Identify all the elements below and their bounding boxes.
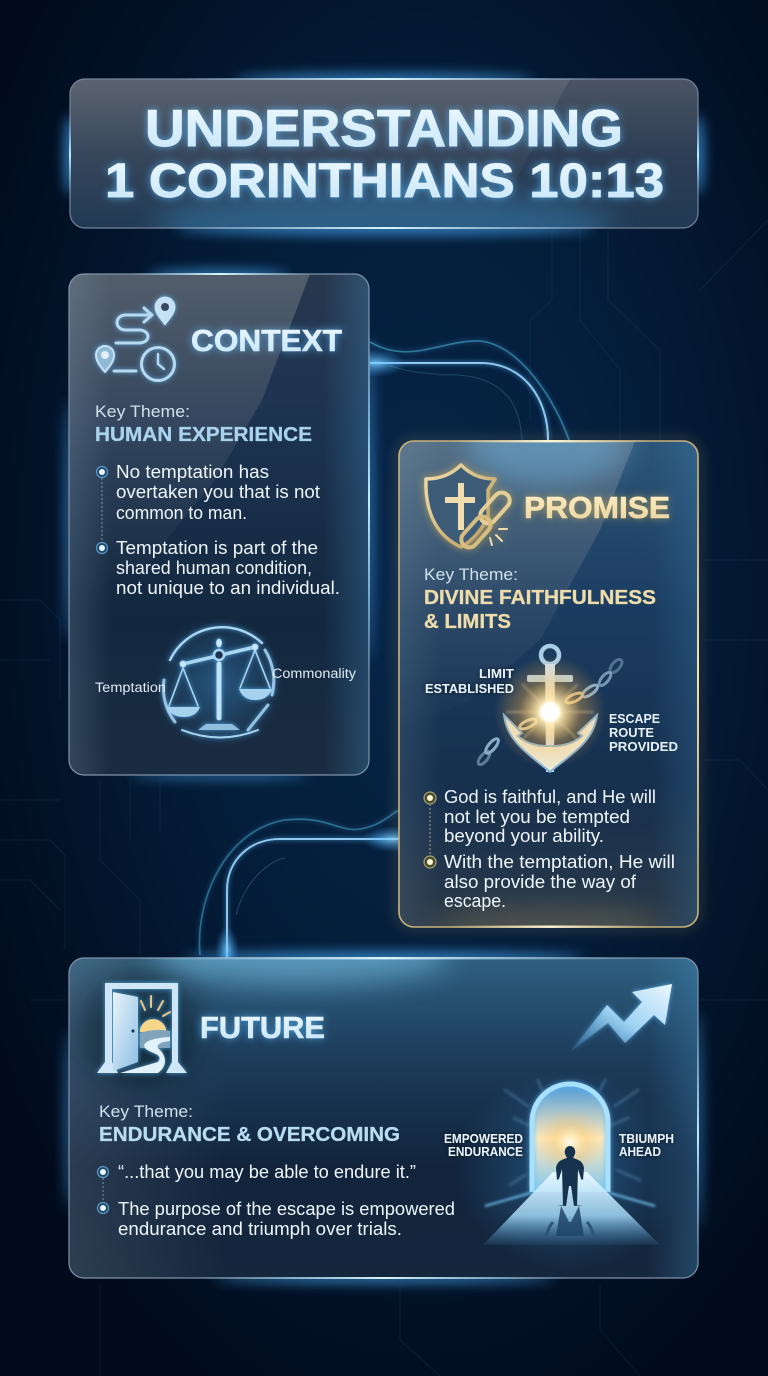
key theme: future: ENDURANCE & OVERCOMING: [99, 1123, 400, 1146]
label: empowered endurance: ENDURANCE: [448, 1145, 523, 1159]
label: triumph ahead: [619, 1132, 674, 1159]
bullets: context: not unique to an individual.: [116, 578, 340, 598]
key theme: promise: [424, 565, 656, 633]
label: empowered endurance: [444, 1132, 523, 1159]
bullets: future: endurance and triumph over trials.: [118, 1219, 402, 1239]
bullets: future: The purpose of the escape is empowered: [118, 1199, 455, 1219]
icon: arched doorway with figure: [455, 1070, 685, 1270]
key theme: context: [95, 402, 312, 446]
panel: future: [65, 925, 702, 1283]
label: escape route provided: ROUTE: [609, 726, 654, 740]
label: limit established: LIMIT: [479, 667, 514, 681]
bullets: future: [98, 1162, 455, 1239]
bullets: promise: [424, 787, 675, 911]
bullets: promise: also provide the way of: [444, 872, 637, 892]
icon: route with pins and clock: [96, 297, 175, 380]
key theme: promise: Key Theme:: [424, 565, 518, 584]
icon: balance scale: [153, 617, 285, 749]
icon: open door with sunrise path: [97, 983, 187, 1073]
key theme: promise: DIVINE FAITHFULNESS: [424, 586, 656, 609]
bullets: promise: God is faithful, and He will: [444, 787, 656, 807]
key theme: future: Key Theme:: [99, 1102, 193, 1121]
key theme: context: HUMAN EXPERIENCE: [95, 424, 312, 446]
title text: UNDERSTANDING: [145, 100, 623, 158]
label: empowered endurance: EMPOWERED: [444, 1132, 523, 1146]
bullets: promise: escape.: [444, 891, 506, 911]
panel: title: [65, 73, 703, 259]
heading: context: CONTEXT: [191, 323, 342, 358]
bullets: context: No temptation has: [116, 462, 269, 482]
heading: future: FUTURE: [200, 1010, 325, 1045]
icon: anchor with broken chain: [476, 646, 624, 772]
key theme: context: Key Theme:: [95, 402, 190, 421]
connector: context to promise: [346, 341, 569, 440]
label: temptation: Temptation: [95, 680, 166, 695]
label: escape route provided: [609, 712, 678, 754]
label: triumph ahead: TBIUMPH: [619, 1132, 674, 1146]
bullets: context: shared human condition,: [116, 558, 312, 578]
bullets: promise: not let you be tempted: [444, 807, 630, 827]
label: escape route provided: PROVIDED: [609, 740, 678, 754]
title text: [105, 100, 664, 208]
bullets: context: Temptation is part of the: [116, 538, 318, 558]
bullets: promise: beyond your ability.: [444, 826, 604, 846]
icon: shield with cross and broken chain: [426, 465, 513, 551]
bullets: context: [96, 462, 340, 598]
panel: context: [65, 270, 373, 779]
label: limit established: [425, 667, 514, 696]
title text: 1 CORINTHIANS 10:13: [105, 155, 664, 208]
bullets: context: overtaken you that is not: [116, 482, 320, 502]
icon: rising arrow: [570, 984, 672, 1052]
heading: promise: PROMISE: [524, 490, 670, 525]
key theme: promise: & LIMITS: [424, 610, 511, 633]
label: limit established: ESTABLISHED: [425, 682, 514, 696]
bullets: promise: With the temptation, He will: [444, 852, 675, 872]
bullets: context: common to man.: [116, 503, 247, 523]
key theme: future: [99, 1102, 400, 1146]
label: triumph ahead: AHEAD: [619, 1145, 661, 1159]
bullets: future: “...that you may be able to endure it.”: [118, 1162, 416, 1182]
panel: promise: [398, 405, 699, 949]
label: escape route provided: ESCAPE: [609, 712, 660, 726]
connector: promise to future: [199, 810, 422, 974]
label: commonality: Commonality: [272, 666, 356, 681]
